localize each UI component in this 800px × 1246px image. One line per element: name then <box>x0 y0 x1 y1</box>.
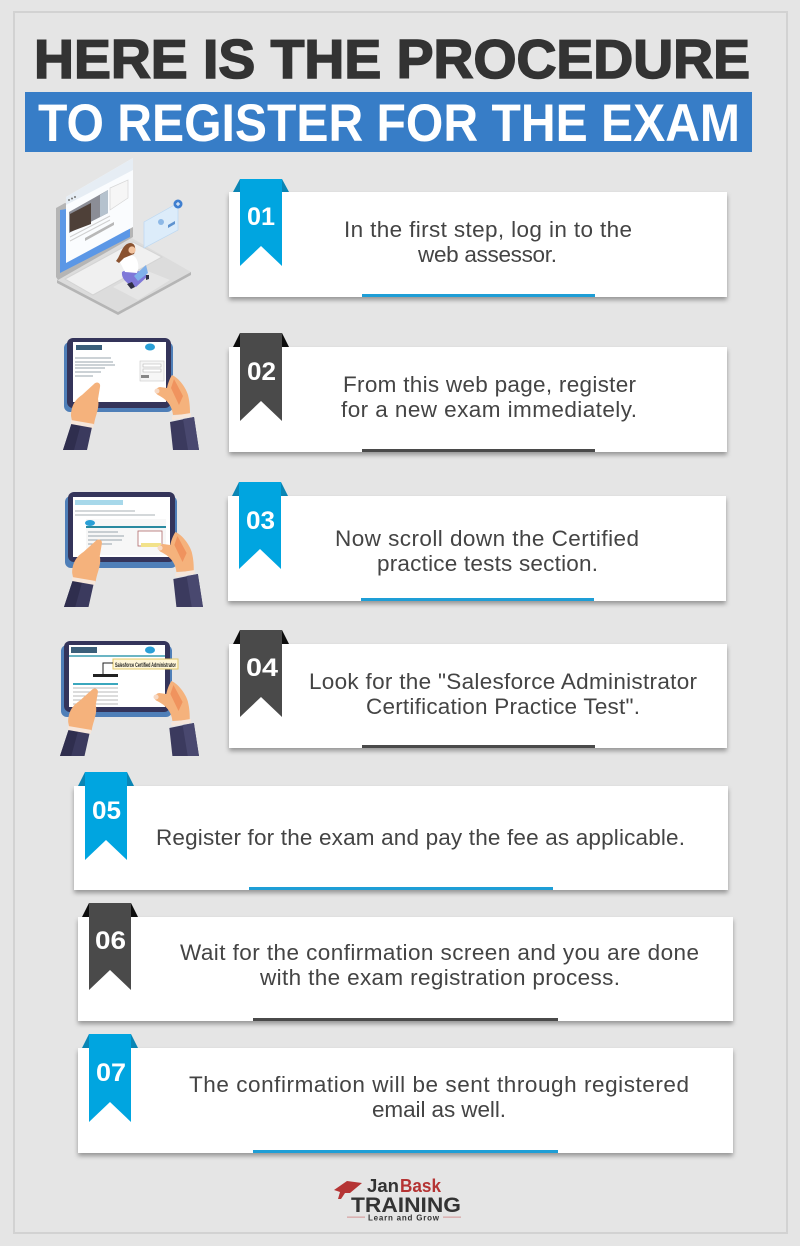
panel: step 06 <box>78 903 733 1021</box>
ribbon 04 <box>240 630 282 717</box>
ribbon 02: 02 <box>247 358 276 386</box>
ribbon 06: 06 <box>95 927 126 955</box>
step 03 text <box>335 526 639 576</box>
ribbon 07: 07 <box>96 1059 126 1087</box>
step 07 text <box>189 1072 689 1122</box>
ribbon 07 <box>89 1034 131 1122</box>
panel: step 07 <box>78 1034 733 1153</box>
logo: JanBask Training: TRAINING <box>351 1194 461 1217</box>
step 02 text: From this web page, register <box>343 372 636 397</box>
step 06 text: with the exam registration process. <box>259 965 620 990</box>
panel: step 05 <box>74 772 728 890</box>
logo: JanBask Training: Jan <box>367 1176 399 1196</box>
ribbon 06 <box>89 903 131 990</box>
ribbon 03: 03 <box>246 507 275 535</box>
panel: step 01 <box>229 179 727 297</box>
step 03 text: practice tests section. <box>377 551 598 576</box>
logo: JanBask Training: Bask <box>400 1176 442 1196</box>
step 06 text <box>180 940 699 990</box>
step 07 text: email as well. <box>372 1097 506 1122</box>
ribbon 03 <box>239 482 281 569</box>
ribbon 05: 05 <box>92 797 121 825</box>
step 01 text: web assessor. <box>417 242 557 267</box>
ribbon 01 <box>240 179 282 266</box>
step 01 text <box>344 217 632 267</box>
ribbon 02 <box>240 333 282 421</box>
logo: JanBask Training <box>334 1176 461 1222</box>
step 03 text: Now scroll down the Certified <box>335 526 639 551</box>
icon: tablet register page <box>64 492 203 607</box>
icon: tablet results page: Salesforce Certified Administrator <box>115 662 176 669</box>
panel: step 02 <box>229 333 727 452</box>
ribbon 04: 04 <box>246 654 278 682</box>
ribbon 05 <box>85 772 127 860</box>
icon: tablet login page <box>63 338 199 450</box>
title: TO REGISTER FOR THE EXAM <box>38 94 740 153</box>
icon: laptop with woman <box>56 158 191 315</box>
step 04 text: Certification Practice Test". <box>366 694 640 719</box>
step 04 text <box>309 669 698 719</box>
ribbon 01: 01 <box>247 203 275 231</box>
step 06 text: Wait for the confirmation screen and you are done <box>180 940 699 965</box>
title: HERE IS THE PROCEDURE <box>34 28 750 90</box>
step 01 text: In the first step, log in to the <box>344 217 632 242</box>
logo: JanBask Training: Learn and Grow <box>368 1214 440 1222</box>
title <box>25 28 752 153</box>
icon: tablet results page <box>60 641 199 756</box>
panel: step 04 <box>229 630 727 748</box>
step 05 text: Register for the exam and pay the fee as applicable. <box>156 825 685 850</box>
step 07 text: The confirmation will be sent through registered <box>189 1072 689 1097</box>
panel: step 03 <box>228 482 726 601</box>
step 04 text: Look for the "Salesforce Administrator <box>309 669 698 694</box>
step 02 text <box>341 372 637 422</box>
step 02 text: for a new exam immediately. <box>341 397 637 422</box>
